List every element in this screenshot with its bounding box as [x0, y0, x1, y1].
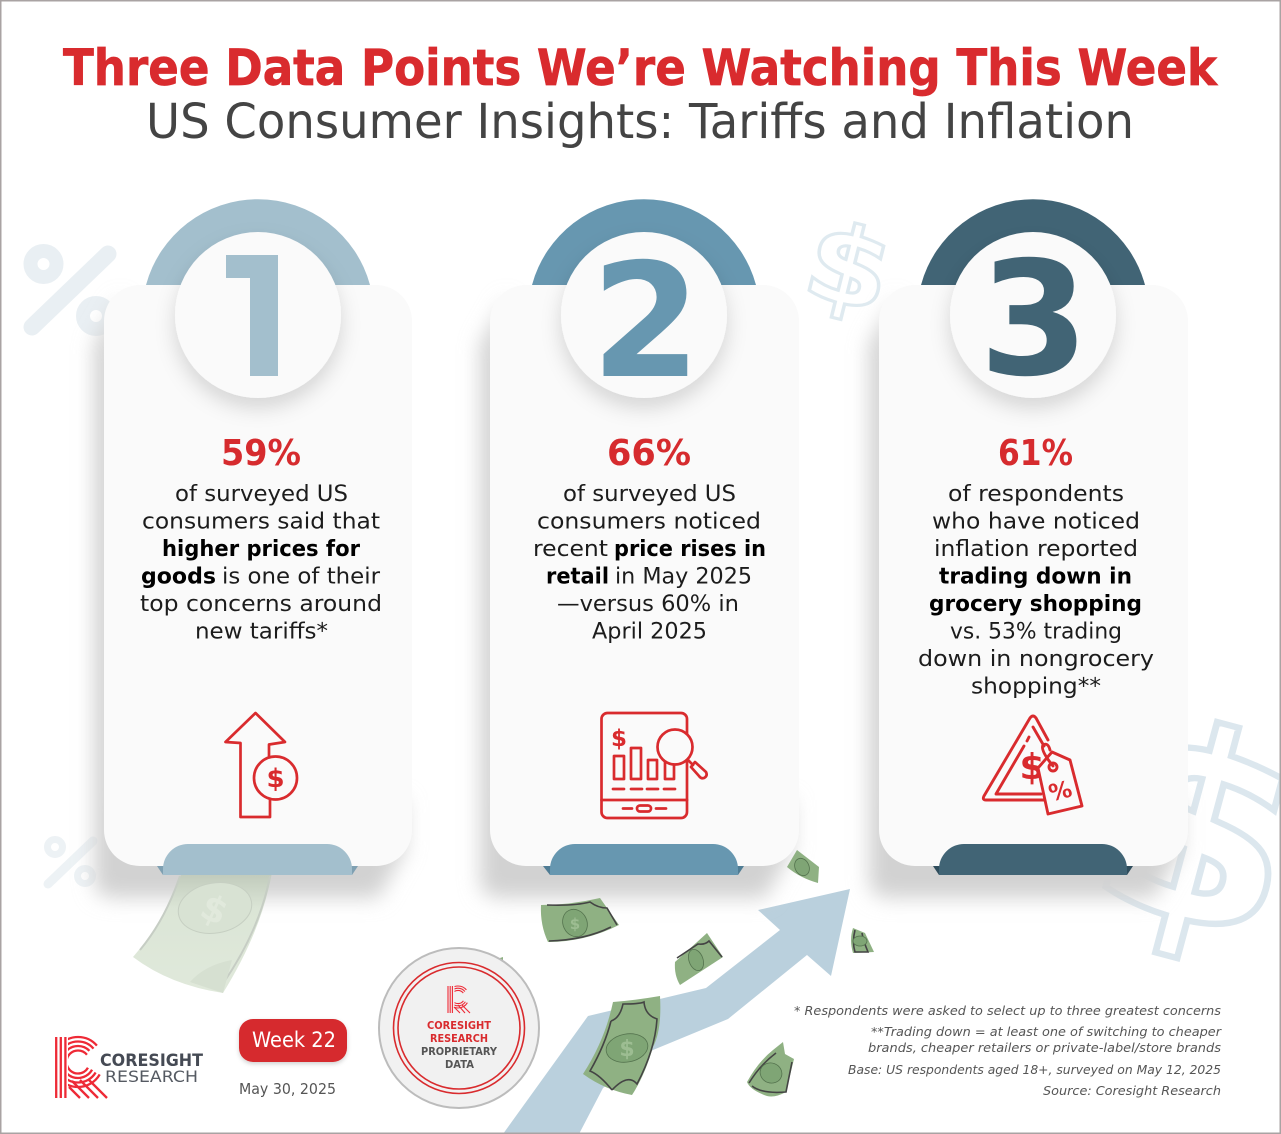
icon: arrow up with dollar: $: [266, 764, 285, 794]
number circle 3: [950, 228, 1116, 412]
statistic 59%: 59%: [221, 433, 301, 474]
text block: card 1: of surveyed US: [175, 482, 348, 507]
text block: card 1: top concerns around: [140, 592, 382, 617]
text block: card 3: who have noticed: [932, 510, 1140, 534]
week badge: Week 22: [252, 1028, 336, 1052]
seal: proprietary data: RESEARCH: [430, 1033, 488, 1045]
text block: card 2: [533, 482, 766, 644]
dollar bill: upper left: [541, 898, 619, 942]
tab: [933, 844, 1133, 875]
logo: Coresight Research: [53, 1037, 204, 1098]
text block: card 1: new tariffs*: [195, 620, 328, 644]
text block: card 1: is one of their: [222, 564, 381, 590]
footnotes: Source: Coresight Research: [1043, 1083, 1221, 1098]
pale dollar bill: [133, 872, 272, 993]
background icon: dollar sign top right: $: [792, 198, 905, 339]
pale dollar bill: $: [194, 886, 234, 934]
dollar bill: large on arrow: [583, 996, 660, 1095]
statistic 61%: 61%: [998, 433, 1073, 474]
footnotes: Base: US respondents aged 18+, surveyed on May 12, 2025: [848, 1062, 1221, 1077]
icon: tablet with chart and magnifier: $: [611, 726, 627, 752]
text block: card 2: —versus 60% in: [557, 592, 739, 617]
text block: card 2: consumers noticed: [537, 510, 761, 534]
text block: card 1: [140, 482, 382, 644]
number circle 1: [175, 218, 341, 414]
number circle 2: 2: [591, 230, 701, 414]
text block: card 2: retail: [546, 564, 609, 590]
text block: card 3: inflation reported: [934, 537, 1138, 562]
footnotes: brands, cheaper retailers or private-label/store brands: [868, 1040, 1221, 1055]
footnotes: **Trading down = at least one of switching to cheaper: [871, 1024, 1222, 1039]
seal: proprietary data: DATA: [445, 1059, 475, 1071]
text block: card 3: trading down in: [939, 564, 1132, 590]
logo: Coresight Research: CORESIGHT: [100, 1051, 204, 1070]
icon: tablet with chart and magnifier: [602, 713, 707, 818]
number circle 2: [561, 230, 727, 414]
text block: card 1: higher prices for: [162, 537, 360, 562]
seal: proprietary data: PROPRIETARY: [421, 1046, 497, 1058]
background icon: percent top left: [30, 251, 109, 329]
small green bill corner behind seal: [494, 957, 503, 968]
dollar bill: middle: [675, 933, 723, 985]
dollar bill: upper left: $: [570, 915, 580, 933]
text block: card 3: vs. 53% trading: [950, 620, 1122, 644]
icon: arrow up with dollar: [226, 713, 297, 817]
number circle 1: 1: [226, 218, 278, 414]
text block: card 3: [918, 482, 1154, 700]
background icon: percent bottom left: [48, 840, 93, 884]
text block: card 2: in May 2025: [615, 564, 752, 590]
tab: [543, 844, 744, 875]
tab: [157, 844, 358, 875]
text block: card 3: of respondents: [948, 482, 1124, 507]
text block: card 3: grocery shopping: [929, 592, 1142, 617]
dollar bill: large on arrow: $: [619, 1037, 635, 1062]
logo: Coresight Research: RESEARCH: [105, 1067, 198, 1086]
seal: proprietary data: CORESIGHT: [427, 1020, 492, 1032]
dollar bill: top right: [787, 850, 819, 883]
text block: card 2: price rises in: [614, 537, 766, 562]
text block: card 1: consumers said that: [142, 510, 380, 534]
seal: proprietary data: [379, 948, 539, 1108]
subtitle: US Consumer Insights: Tariffs and Inflation: [146, 94, 1134, 150]
footnotes: * Respondents were asked to select up to three greatest concerns: [794, 1003, 1221, 1018]
text block: card 1: goods: [141, 564, 216, 590]
growth arrow: [503, 889, 850, 1134]
text block: card 3: down in nongrocery: [918, 647, 1154, 672]
panel: card 2: [480, 199, 799, 898]
icon: warning triangle with price tag: [983, 716, 1082, 814]
icon: warning triangle with price tag: $: [1019, 747, 1045, 788]
icon: warning triangle with price tag: %: [1046, 777, 1075, 807]
week badge: [239, 1019, 347, 1062]
text block: card 2: April 2025: [592, 620, 707, 644]
text block: card 2: of surveyed US: [563, 482, 736, 507]
dollar bill: lower right: [747, 1042, 794, 1096]
panel: card 1: [94, 199, 412, 993]
text block: card 2: recent: [533, 537, 608, 562]
seal logo mark: [447, 986, 470, 1013]
number circle 3: 3: [979, 228, 1089, 412]
text block: card 3: shopping**: [971, 674, 1101, 700]
statistic 66%: 66%: [607, 433, 691, 474]
footnotes: [794, 1003, 1222, 1098]
panel: card 3: [869, 199, 1188, 898]
dollar bill: right small: [851, 928, 874, 953]
date: May 30, 2025: [239, 1080, 336, 1098]
